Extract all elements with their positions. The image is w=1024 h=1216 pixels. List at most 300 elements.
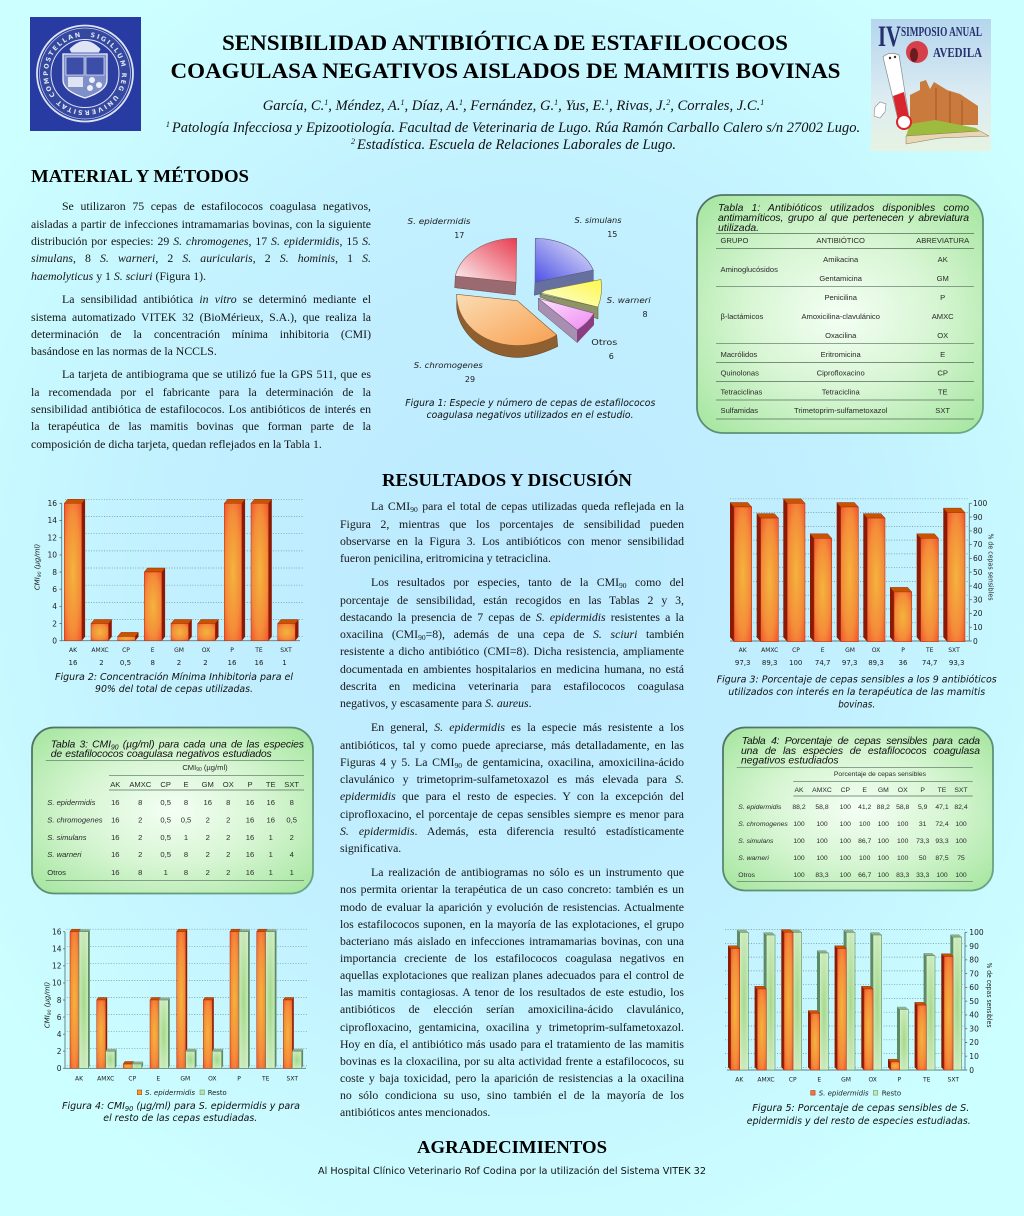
tabla 3 title: 90 [111,744,119,752]
x axis labels: GM [180,1076,190,1082]
pie labels: 15 [607,230,617,239]
tabla 3 content: 1 [269,868,273,877]
tabla 4 content: CP [841,787,850,794]
x axis labels and values: GM [845,647,855,654]
tabla 3 content: 2 [226,868,230,877]
text block: resultados paragraph 4: antibióticos de elección serían amoxicilina-ácido clavulánico, [340,1002,684,1016]
x axis labels and values: E [821,647,825,654]
pie slice: otros [538,298,594,343]
tabla 4 content: S. epidermidis [738,804,782,811]
tabla 3 content: 2 [138,833,142,842]
authors and affiliations: 2 [666,98,670,107]
figure 2 caption: 90% del total de cepas utilizadas. [95,684,253,695]
bars [64,499,298,641]
figure 1: pie chart [405,216,655,421]
panel: tabla 4 [723,728,993,890]
tabla 3 title: (µg/ml) para cada una de las especies [118,740,304,750]
tabla 4 content: AK [794,787,804,794]
x axis labels and values: CP [792,647,800,654]
tabla 4 content: 58,8 [896,804,910,811]
y axis labels: % de cepas sensibles [986,534,994,601]
tabla 4 content: Otros [738,872,756,879]
text block: material y métodos paragraph 2: La sensibilidad antibiótica in vitro se determinó mediante el [62,292,371,306]
tabla 4 title: una de las especies de estafilococos coagulasa [741,746,980,757]
y axis labels: CMI [34,577,42,590]
tabla 1 title: utilizada. [718,223,759,234]
text block: resultados paragraph 3: En general, S. epidermidis es la especie más resistente a los [371,720,684,734]
tabla 3 content: 1 [184,833,188,842]
x axis labels: OX [208,1076,217,1082]
tabla 4 content: 100 [840,821,851,828]
figure 3: bar chart percentage sensitive [717,499,997,710]
y axis labels: 100 [973,499,988,508]
tabla 3 content: 1 [269,833,273,842]
text block: material y métodos paragraph 2: determinación de la concentración mínima inhibitoria (CMI) [31,327,371,341]
x axis labels and values: SXT [948,647,960,654]
y axis labels: 10 [973,623,983,632]
authors and affiliations: , Rivas, J. [609,98,666,114]
tabla 3 content: AMXC [129,780,152,789]
tabla 3 content: AK [110,780,120,789]
y axis labels: 8 [52,568,57,577]
text block: resultados paragraph 4: las mamitis contagiosas. A tenor de los resultados de este estudio, los [340,985,684,999]
authors and affiliations: García, C. [263,98,324,114]
tabla 4 content: OX [898,787,908,794]
tabla 1 content: Tetraciclinas [720,388,762,396]
heading: resultados y discusión: RESULTADOS Y DISCUSIÓN [382,469,632,490]
y axis labels: 90 [969,942,979,951]
figure 4: grouped bar chart CMI90 [44,928,308,1124]
x axis labels and values: AK [739,647,748,654]
tabla 4 content [738,771,968,879]
authors and affiliations: 1 [605,98,609,107]
tabla 3 content: E [183,780,189,789]
x axis labels and values: P [901,647,905,654]
tabla 3 content: 16 [111,798,120,807]
figure 2 caption [55,671,293,695]
y axis labels: 0 [969,1066,974,1075]
text block: resultados paragraph 2 [340,575,684,710]
text block: material y métodos paragraph 3 [31,367,371,451]
tabla 3 content: 16 [246,833,254,842]
tabla 3 content: 2 [226,850,230,859]
text block: resultados paragraph 3: ciprofloxacino, el porcentaje de cepas sensibles siempre es menor para [340,807,684,821]
text block: material y métodos paragraph 3: composición de dicha tarjeta, quedan reflejados en la Tabla 1. [31,437,322,451]
x axis labels: SXT [948,1076,959,1084]
y axis labels: 2 [52,620,57,628]
text block: material y métodos paragraph 2 [31,292,371,358]
authors and affiliations: , Yus, E. [558,98,605,114]
x axis labels and values: OX [872,647,880,654]
tabla 3 content: 0,5 [181,816,191,824]
tabla 3 content: 90 [196,767,202,773]
tabla 1 content: Oxacilina [825,331,857,340]
text block: material y métodos paragraph 3: La tarjeta de antibiograma que se utilizó fue la GPS 511, que es [62,367,371,381]
x axis labels: E [156,1076,160,1082]
tabla 4 content: 93,3 [935,838,949,845]
y axis labels [34,499,57,646]
x axis labels and values: TE [925,647,934,654]
text block: material y métodos paragraph 1 [31,199,371,283]
y axis labels: 90 [973,513,983,522]
tabla 3 content: 16 [111,850,120,859]
tabla 3 content: 2 [226,833,230,842]
x axis labels and values: 0,5 [120,659,131,667]
tabla 3 content: 8 [138,868,142,877]
tabla 4 content: 100 [840,855,851,862]
text block: resultados paragraph 4: nos permita orientar la terapéutica de un caso concreto: también es un [340,882,684,896]
text block: material y métodos paragraph 2: sistema automatizado VITEK 32 (BioMérieux, S.A.), que realiza la [31,310,371,324]
tabla 1 content: Ciprofloxacino [817,368,865,378]
heading: material y métodos: MATERIAL Y MÉTODOS [31,165,249,186]
tabla 3 content: 1 [269,850,273,859]
tabla 3 content: 8 [138,798,142,807]
x axis labels: OX [868,1076,877,1084]
text block: material y métodos paragraph 3: sensibilidad antibiótica de estafilococos. Los antibióticos de interés en [31,402,371,416]
tabla 4 content: 75 [957,855,965,862]
x axis labels: AMXC [97,1076,114,1082]
x axis labels and values: AMXC [91,647,109,654]
tabla 4 content: 100 [897,838,909,845]
tabla 1 content: Sulfamidas [720,406,758,415]
tabla 4 content: S. chromogenes [738,821,788,828]
tabla 4 content: 100 [878,855,889,862]
pie labels [408,216,652,384]
tabla 4 content: 82,4 [954,804,968,811]
logo: IV Simposio Anual Avedila: IV [878,20,901,53]
tabla 4 content: 5,9 [918,804,928,811]
text block: resultados paragraph 3: Figuras 4 y 5. La CMI90 de gentamicina, oxacilina, amoxicilina-ácido [340,755,684,770]
tabla 3 content: 8 [290,798,294,807]
x axis labels: TE [261,1076,270,1082]
tabla 4 content: 88,2 [792,804,806,811]
tabla 4 content: 100 [793,838,805,845]
y axis labels [969,928,993,1075]
pie slice: S. simulans [534,238,593,295]
text block: resultados paragraph 3: epidermidis que para el resto de especies. Y con la excepción del [340,789,684,803]
text block: resultados paragraph 2: porcentaje de sensibilidad, están recogidos en las Tablas 2 y 3, [340,593,684,607]
text block: resultados paragraph 2: oxacilina (CMI90=8), además de una cepa de S. sciuri también [340,627,684,642]
tabla 3 content: 2 [290,833,294,842]
y axis labels: (µg/ml) [34,544,42,571]
figure 3 caption: bovinas. [838,700,875,710]
tabla 3 content: 2 [206,816,210,824]
tabla 4 content: 100 [955,838,967,845]
tabla 3 content: 8 [226,798,230,807]
title [170,29,840,83]
x axis labels and values: 89,3 [762,659,777,667]
x axis labels and values: 74,7 [922,659,937,667]
x axis labels and values: 74,7 [815,659,830,667]
tabla 4 content: 100 [936,872,948,879]
text block: material y métodos paragraph 3: la terapéutica de las mamitis bovinas que forman parte de la [31,419,371,433]
figure 4 caption: 90 [125,1105,134,1113]
text block: material y métodos paragraph 1: distribución por especies: 29 S. chromogenes, 17 S. epidermidis, 15 S. [31,234,371,248]
x axis labels and values: 97,3 [842,659,857,667]
y axis labels: 60 [969,983,979,992]
pie slice: S. epidermidis [455,238,517,295]
tabla 1 content: Amikacina [823,255,859,264]
x axis labels and values: SXT [280,647,292,654]
tabla 4 content: SXT [954,787,968,794]
tabla 4 content: 100 [840,804,851,811]
tabla 4 content: 33,3 [916,872,930,879]
authors and affiliations: 1 [324,98,328,107]
text block: resultados paragraph 4: los estafilococos suponen, en la mayoría de las explotaciones, el grupo [340,917,684,931]
authors and affiliations: 1 [554,98,558,107]
tabla 3 content: (µg/ml) [202,763,228,772]
tabla 3 content: 2 [138,850,142,859]
text block: material y métodos paragraph 2: basándose en las normas de la NCCLS. [31,344,217,358]
pie labels: S. simulans [574,216,622,225]
x axis labels and values: 2 [99,659,104,667]
legend: S. epidermidis [819,1090,869,1098]
tabla 3 content: 8 [184,798,188,807]
x axis labels and values [735,647,964,667]
tabla 4 content: 47,1 [935,804,949,811]
tabla 4 content: GM [878,787,889,794]
authors and affiliations: Patología Infecciosa y Epizootiología. Facultad de Veterinaria de Lugo. Rúa Ramón Carballo Calero s/n 27002 Lugo. [171,120,860,136]
y axis labels: 16 [47,499,57,508]
tabla 1 content: SXT [935,406,950,415]
tabla 3 title: de estafilococos coagulasa negativos estudiados [51,749,272,760]
text block: resultados paragraph 4: antibióticos antes mencionados. [340,1105,490,1119]
tabla 4 content: 100 [955,872,967,879]
x axis labels and values: 8 [150,659,155,667]
x axis labels and values: 1 [282,659,287,667]
tabla 3 content: 16 [246,798,254,807]
figure 3 caption: Figura 3: Porcentaje de cepas sensibles a los 9 antibióticos [717,674,997,686]
text block: resultados paragraph 3: significativa. [340,841,401,855]
tabla 3 content: 0,5 [160,798,171,807]
tabla 3 content: 0,5 [286,816,297,824]
x axis labels and values: OX [202,647,210,654]
authors and affiliations: , Méndez, A. [328,98,401,114]
text block: material y métodos paragraph 1: simulans, 8 S. warneri, 2 S. auricularis, 2 S. hominis, 1 S. [31,251,371,265]
tabla 4 content: 100 [816,855,828,862]
x axis labels and values: GM [174,647,184,654]
tabla 1 content: Trimetoprim-sulfametoxazol [794,406,888,415]
y axis labels: 14 [52,944,62,954]
y axis labels: 12 [47,534,57,542]
text block: material y métodos paragraph 1: aisladas a partir de infecciones intramamarias bovinas, con la siguiente [31,217,371,231]
x axis labels and values: AMXC [761,647,778,654]
panel: tabla 1 [697,195,983,433]
tabla 1 content: TE [938,388,948,396]
x axis labels and values: E [151,647,155,654]
figure 5 caption: epidermidis y del resto de especies estudiadas. [747,1116,971,1127]
text block: resultados paragraph 4: aquellas explotaciones que realizan planes adecuados para el control de [340,968,684,982]
tabla 1 title [718,203,969,234]
tabla 4 content: 100 [878,838,889,845]
tabla 1 content: CP [937,368,948,378]
x axis labels: AK [75,1076,84,1082]
tabla 3 content: 16 [246,816,254,824]
text block: resultados paragraph 2: negativos, y escasamente para S. aureus. [340,696,532,710]
tabla 4 content: 100 [816,821,828,828]
tabla 4 content: 83,3 [815,872,829,879]
y axis labels: 10 [52,978,62,988]
tabla 3 content: 0,5 [160,850,171,859]
tabla 3 content: S. simulans [47,833,87,842]
x axis labels and values: CP [122,647,130,654]
pie labels: 6 [609,352,614,361]
figure 3 caption [717,674,997,710]
y axis labels: 6 [57,1013,62,1022]
heading: agradecimientos: AGRADECIMIENTOS [417,1137,607,1157]
title: SENSIBILIDAD ANTIBIÓTICA DE ESTAFILOCOCOS [222,29,788,55]
tabla 3 content: P [247,780,253,789]
y axis labels: 70 [973,540,983,549]
tabla 1 content: Amoxicilina-clavulánico [801,312,880,321]
text block: resultados paragraph 3: antibióticos, tal y como puede apreciarse, más detalladamente, en las [340,738,684,752]
logo: IV Simposio Anual Avedila: SIMPOSIO ANUAL [901,25,982,40]
x axis labels [735,1076,959,1084]
bars [728,930,962,1070]
text block: resultados paragraph 4 [340,865,684,1119]
text block: resultados paragraph 3: clavulánico y trimetoprim-sulfametoxazol es más elevada para S. [340,772,684,786]
authors and affiliations: , Díaz, A. [405,98,459,114]
x axis labels: AK [735,1076,744,1084]
authors and affiliations: Estadística. Escuela de Relaciones Laborales de Lugo. [356,137,676,153]
tabla 1 content: E [940,350,945,359]
tabla 1 title: Tabla 1: Antibióticos utilizados disponibles como [718,203,969,214]
tabla 1 content: AK [938,255,948,264]
figure 1 caption [405,397,655,421]
text block: resultados paragraph 1: Figura 2, mientras que los porcentajes de sensibilidad pueden [340,517,684,531]
tabla 3 content: 0,5 [160,833,171,842]
pie labels: 29 [465,375,475,384]
tabla 3 content: 16 [246,850,254,859]
tabla 4 content: 100 [816,838,828,845]
tabla 3 content: 2 [226,816,230,824]
logo: university seal: SIGILLUM REG UNIVERSITAT COMPOSTELLAN [43,32,127,115]
y axis labels: 16 [52,928,62,936]
figure 1 caption: Figura 1: Especie y número de cepas de estafilococos [405,397,655,409]
panel: tabla 3 [32,728,313,894]
pie labels: S. warneri [607,296,652,305]
tabla 4 content: 88,2 [877,804,890,811]
y axis labels [973,499,994,646]
tabla 3 content: CP [160,780,171,789]
x axis labels and values: 16 [228,659,237,667]
text block: resultados paragraph 2: resistente a dicho antibiótico (CMI=8). Dicha resistencia, ampliamente [340,644,684,658]
x axis labels and values: 16 [69,659,78,667]
y axis labels: 90 [47,1009,53,1015]
tabla 4 content: 100 [859,855,871,862]
authors and affiliations: 1 [459,98,463,107]
tabla 3 content [47,763,299,877]
legend: S. epidermidis [145,1089,195,1097]
y axis labels: 60 [973,554,983,563]
tabla 1 content: Gentamicina [819,274,863,283]
tabla 3 title [51,740,304,760]
text block: resultados paragraph 3: S. epidermidis. Además, esta diferencia resultó estadísticamente [340,824,684,838]
tabla 3 content: S. chromogenes [47,816,103,824]
x axis labels and values: 2 [203,659,208,667]
x axis labels: CP [128,1076,137,1082]
authors and affiliations: 1 [760,98,764,107]
tabla 1 content: GM [937,274,949,283]
text block: resultados paragraph 3 [340,720,684,855]
figure 5 caption: Figura 5: Porcentaje de cepas sensibles de S. [752,1103,969,1114]
logo: university seal [30,17,141,131]
logo: IV Simposio Anual Avedila: AVEDILA [933,46,983,61]
y axis labels: 40 [973,582,983,591]
text block: resultados paragraph 4: importancia creciente de los estafilococos coagulasa negativos en [340,951,684,965]
tabla 3 content: S. epidermidis [47,798,96,807]
authors and affiliations: 1 [401,98,405,107]
pie labels: Otros [591,338,617,347]
tabla 4 content: 100 [955,821,967,828]
y axis labels: 4 [52,602,57,611]
tabla 3 content: 16 [266,816,275,824]
tabla 4 content: 100 [840,838,851,845]
tabla 3 content: CMI [182,763,196,772]
tabla 4 content: Porcentaje de cepas sensibles [834,771,927,778]
tabla 4 content: AMXC [812,787,832,794]
text block: resultados paragraph 2: documentada en ambientes hospitalarios en medicina humana, no está [340,662,684,676]
tabla 1 content: β-lactámicos [720,312,763,321]
tabla 4 content: S. warneri [738,855,769,862]
y axis labels: 8 [57,996,62,1005]
x axis labels and values: 89,3 [868,659,884,667]
y axis labels: 12 [52,962,62,970]
x axis labels: E [817,1076,821,1084]
tabla 1 content: Aminoglucósidos [720,265,778,274]
tabla 4 content: P [920,787,925,794]
tabla 3 title: Tabla 3: CMI [51,740,111,750]
tabla 4 content: 58,8 [815,804,829,811]
tabla 1 content: Quinolonas [720,368,759,378]
y axis labels: 10 [47,550,57,560]
tabla 4 title: Tabla 4: Porcentaje de cepas sensibles para cada [742,736,980,747]
y axis labels [44,928,62,1073]
x axis labels and values: 2 [177,659,181,667]
tabla 1 content: Tetraciclina [822,388,860,396]
x axis labels: TE [922,1076,931,1084]
tabla 3 content: 16 [111,816,120,824]
y axis labels: 90 [37,571,43,577]
tabla 1 content: AMXC [932,312,954,321]
tabla 3 content: GM [202,780,214,789]
tabla 3 content: OX [223,780,234,789]
y axis labels: 70 [969,970,979,978]
text block: resultados paragraph 2: Los resultados por especies, tanto de la CMI90 como del [371,575,684,590]
tabla 4 content: 100 [859,821,871,828]
tabla 1 content: ABREVIATURA [916,236,970,245]
tabla 3 content: 1 [290,868,294,877]
y axis labels: 20 [973,609,983,618]
tabla 3 content: 16 [203,798,212,807]
text block: resultados paragraph 4: no sólo condiciona su uso, sino también el de la mayoría de los [340,1088,684,1102]
y axis labels: 10 [969,1052,979,1061]
title: COAGULASA NEGATIVOS AISLADOS DE MAMITIS BOVINAS [170,58,840,83]
tabla 4 content: 73,3 [916,838,930,845]
x axis labels and values: TE [254,647,263,654]
authors and affiliations: , Fernández, G. [463,98,554,114]
text block: resultados paragraph 4: Hoy en día, el antibiótico más usado para el tratamiento de las mamitis [340,1037,684,1051]
y axis labels: 0 [973,637,978,646]
tabla 4 content: 72,4 [935,821,949,828]
text block: resultados paragraph 2: destacando la presencia de 7 cepas de S. epidermidis resistentes a la [340,610,684,624]
tabla 4 content: 100 [897,855,909,862]
tabla 3 content: 2 [206,868,210,877]
figure 2 caption: Figura 2: Concentración Mínima Inhibitoria para el [55,671,293,683]
legend: Resto [208,1089,227,1097]
text block: material y métodos paragraph 1: Se utilizaron 75 cepas de estafilococos coagulasa negativos, [62,199,371,213]
tabla 1 content [720,236,970,415]
